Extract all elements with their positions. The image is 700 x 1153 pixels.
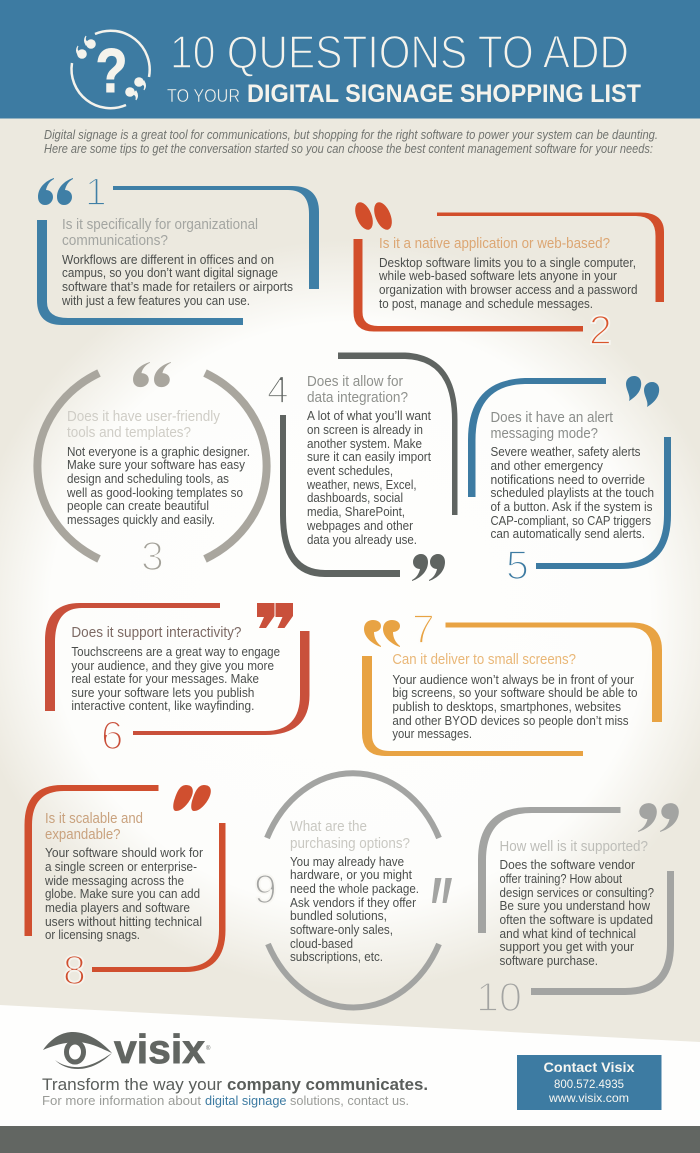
number 1: 1 xyxy=(85,171,107,214)
contact box: Contact Visix xyxy=(544,1059,635,1075)
number 9: 9 xyxy=(254,866,277,912)
bracket frame xyxy=(362,622,662,756)
title line one: 10 QUESTIONS TO ADD xyxy=(170,26,629,78)
panel 3: user-friendly tools xyxy=(37,362,267,579)
body text: Your software should work for xyxy=(45,846,203,860)
body text: sure your software lets you publish xyxy=(71,686,254,700)
heading: Does it allow for xyxy=(307,373,403,390)
panel 1: organizational communications xyxy=(37,171,319,325)
sub line: digital signage xyxy=(205,1094,287,1108)
title line two: TO YOUR xyxy=(167,86,240,106)
body text: of a button. Ask if the system is xyxy=(490,500,652,514)
body text xyxy=(500,858,654,968)
circular frame xyxy=(267,773,439,1008)
panel 9: purchasing options xyxy=(254,773,452,1008)
heading: Does it have user-friendly xyxy=(67,408,220,425)
logo: visix eye xyxy=(43,1026,211,1072)
bracket frame xyxy=(354,212,664,332)
heading: messaging mode? xyxy=(490,425,598,442)
number 5: 5 xyxy=(506,542,529,588)
panel 4: data integration xyxy=(267,352,458,581)
bracket frame xyxy=(280,352,458,577)
body text: support you get with your xyxy=(500,940,634,954)
icon: quote slanted xyxy=(352,200,395,232)
heading: tools and templates? xyxy=(67,424,191,441)
heading xyxy=(67,408,220,441)
body text: bundled solutions, xyxy=(290,909,387,923)
body text xyxy=(290,855,419,964)
body text: and other BYOD devices so people don’t miss xyxy=(392,714,629,728)
body text: and what kind of technical xyxy=(500,927,636,941)
body text xyxy=(66,445,250,527)
bracket frame xyxy=(468,378,671,569)
tagline: Transform the way your xyxy=(42,1075,222,1094)
number 3: 3 xyxy=(141,533,164,579)
icon: question mark in quote ring xyxy=(72,31,150,108)
panel 2: native or web-based xyxy=(352,200,664,353)
contact box xyxy=(517,1055,662,1110)
footer panel xyxy=(0,1005,700,1126)
body text xyxy=(44,846,203,942)
heading xyxy=(307,373,408,406)
body text: interactive content, like wayfinding. xyxy=(71,699,254,713)
icon: closing quote xyxy=(638,803,679,832)
body text: weather, news, Excel, xyxy=(306,478,416,492)
sub line: For more information about xyxy=(42,1094,202,1108)
tagline: company communicates. xyxy=(227,1075,428,1094)
bracket frame xyxy=(45,603,310,735)
body text: notifications need to override xyxy=(490,473,645,487)
body text: with just a few features you can use. xyxy=(61,294,250,308)
body text: software purchase. xyxy=(500,954,598,968)
bracket frame xyxy=(478,807,674,995)
icon: opening quote xyxy=(133,362,171,387)
body text: data you already use. xyxy=(307,533,417,547)
icon: slanted quote xyxy=(173,785,211,811)
body text: offer training? How about xyxy=(500,872,622,886)
heading: Does it support interactivity? xyxy=(71,624,241,641)
body text: publish to desktops, smartphones, websites xyxy=(392,700,621,714)
heading xyxy=(490,409,614,442)
body text: design and scheduling tools, as xyxy=(67,472,229,486)
heading xyxy=(62,216,258,249)
body text: people can create beautiful xyxy=(67,499,209,513)
body text: event schedules, xyxy=(307,464,393,478)
heading: Does it have an alert xyxy=(490,409,614,426)
number 4: 4 xyxy=(267,369,289,412)
contact box: www.visix.com xyxy=(548,1091,629,1105)
body text xyxy=(306,409,431,547)
icon: question mark in quote ring: ? xyxy=(96,37,128,106)
body text: A lot of what you’ll want xyxy=(307,409,431,423)
body text: can automatically send alerts. xyxy=(490,527,645,541)
number 6: 6 xyxy=(101,714,123,758)
body text: hardware, or you might xyxy=(290,868,412,882)
body text: often the software is updated xyxy=(500,913,653,927)
heading: purchasing options? xyxy=(290,835,410,852)
heading: Is it a native application or web-based? xyxy=(379,235,610,252)
heading: Can it deliver to small screens? xyxy=(392,651,576,668)
logo: visix eye: ® xyxy=(206,1045,211,1052)
body text: big screens, so your software should be able to xyxy=(392,686,638,700)
body text xyxy=(392,673,638,741)
panel 6: interactivity xyxy=(45,603,310,758)
logo: visix eye: visix xyxy=(114,1026,205,1072)
body text: software that’s made for retailers or airports xyxy=(62,280,293,294)
body text: You may already have xyxy=(290,855,404,869)
icon: thin quote xyxy=(432,878,452,903)
heading: data integration? xyxy=(307,389,408,406)
panel 10: support xyxy=(476,803,679,1020)
body text: dashboards, social xyxy=(307,491,403,505)
heading: How well is it supported? xyxy=(500,838,648,855)
header banner xyxy=(0,0,700,118)
body text: and other emergency xyxy=(490,459,604,473)
body text: on screen is already in xyxy=(307,423,423,437)
circular frame xyxy=(37,373,267,559)
body text: campus, so you don’t want digital signage xyxy=(62,266,278,280)
heading: communications? xyxy=(62,232,168,249)
body text xyxy=(71,645,280,713)
body text: while web-based software lets anyone in your xyxy=(378,269,617,283)
body text: users without hitting technical xyxy=(45,915,202,929)
body text: well as good-looking templates so xyxy=(66,486,243,500)
body text: wide messaging across the xyxy=(44,874,184,888)
number 7: 7 xyxy=(412,606,435,652)
body text: your messages. xyxy=(392,727,472,741)
body text: a single screen or enterprise- xyxy=(45,860,197,874)
body text: Does the software vendor xyxy=(500,858,635,872)
body text: webpages and other xyxy=(306,519,413,533)
number 10: 10 xyxy=(476,974,522,1020)
body text: Severe weather, safety alerts xyxy=(490,445,640,459)
sub line: solutions, contact us. xyxy=(290,1094,409,1108)
body text xyxy=(490,445,654,541)
body text: scheduled playlists at the touch xyxy=(490,486,654,500)
icon: opening quote xyxy=(364,620,400,647)
body text: CAP-compliant, so CAP triggers xyxy=(490,514,651,528)
heading xyxy=(45,810,143,843)
body text: to post, manage and schedule messages. xyxy=(379,297,593,311)
heading: Is it scalable and xyxy=(45,810,143,827)
body text: another system. Make xyxy=(307,437,422,451)
body text: cloud-based xyxy=(290,937,353,951)
body text: Not everyone is a graphic designer. xyxy=(67,445,250,459)
icon: closing quote drops xyxy=(626,376,659,407)
body text: Touchscreens are a great way to engage xyxy=(71,645,280,659)
body text: Your audience won’t always be in front of your xyxy=(392,673,634,687)
heading: expandable? xyxy=(45,826,120,843)
body text: sure it can easily import xyxy=(307,450,431,464)
body text xyxy=(378,256,638,311)
body text: need the whole package. xyxy=(290,882,419,896)
body text: messages quickly and easily. xyxy=(67,513,215,527)
icon: closing quote square xyxy=(257,603,293,628)
icon: closing quote xyxy=(412,554,445,581)
number 8: 8 xyxy=(63,947,86,993)
body text: Desktop software limits you to a single computer, xyxy=(379,256,636,270)
body text: or licensing snags. xyxy=(45,928,140,942)
body text: organization with browser access and a password xyxy=(379,283,638,297)
number 2: 2 xyxy=(589,307,612,353)
contact box: 800.572.4935 xyxy=(554,1077,624,1091)
heading: Is it specifically for organizational xyxy=(62,216,258,233)
bracket frame xyxy=(24,785,226,972)
body text: globe. Make sure you can add xyxy=(45,887,200,901)
icon: opening quote xyxy=(38,178,73,205)
body text: Be sure you understand how xyxy=(500,899,651,913)
intro text xyxy=(44,128,658,156)
body text: design services or consulting? xyxy=(500,886,654,900)
body text: real estate for your messages. Make xyxy=(71,672,259,686)
body text: media, SharePoint, xyxy=(307,505,405,519)
body text: software-only sales, xyxy=(290,923,393,937)
body text: Ask vendors if they offer xyxy=(290,896,416,910)
heading: What are the xyxy=(290,818,367,835)
body text: media players and software xyxy=(45,901,190,915)
body text: Make sure your software has easy xyxy=(67,458,246,472)
body text: Workflows are different in offices and on xyxy=(62,253,274,267)
body text: your audience, and they give you more xyxy=(71,659,274,673)
title line two: DIGITAL SIGNAGE SHOPPING LIST xyxy=(247,80,641,108)
footer bar xyxy=(0,1126,700,1153)
bracket frame xyxy=(37,186,319,325)
body text: subscriptions, etc. xyxy=(290,950,383,964)
panel 8: scalable xyxy=(24,785,226,993)
body text xyxy=(61,253,293,308)
panel 7: small screens xyxy=(362,606,662,756)
heading xyxy=(290,818,410,852)
panel 5: alert messaging xyxy=(468,376,671,588)
